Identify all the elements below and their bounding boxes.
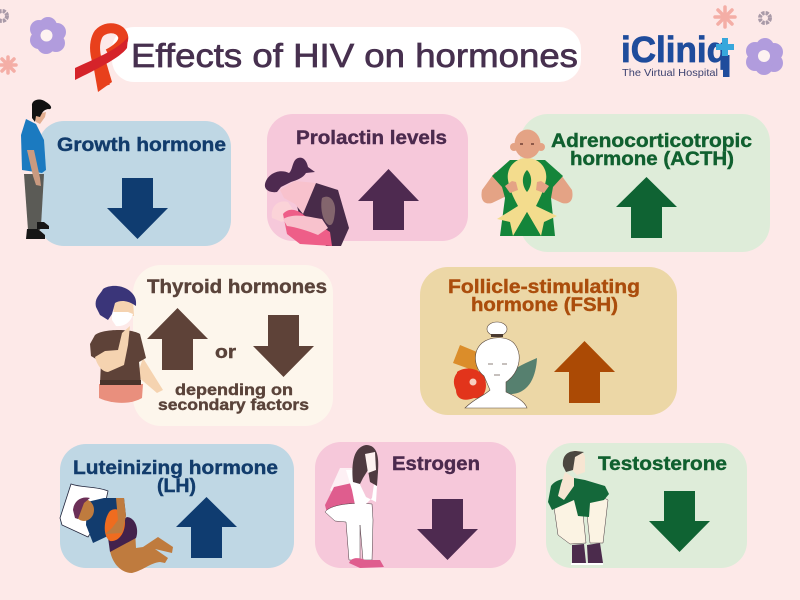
panel: ACTH: hormone (ACTH) <box>570 149 734 170</box>
arrow: down <box>253 315 314 377</box>
panel: thyroid hormones <box>90 265 333 426</box>
icon: man with yellow ribbon <box>481 130 573 236</box>
decorative flowers, top right <box>715 7 783 75</box>
arrow: up <box>147 308 208 370</box>
title banner: Effects of HIV on hormones <box>131 37 578 74</box>
panel: prolactin levels <box>265 114 468 246</box>
decorative flowers, top left <box>0 11 66 73</box>
title banner <box>112 27 581 82</box>
icon: sad woman sitting <box>325 445 384 568</box>
text: secondary factors: depending on <box>175 382 293 399</box>
panel: luteinizing hormone <box>60 444 294 573</box>
heading: estrogen: Estrogen <box>392 454 480 475</box>
icon: person with face mask <box>90 286 163 403</box>
arrow: down <box>649 491 710 552</box>
arrow: up <box>616 177 677 238</box>
panel: FSH: hormone (FSH) <box>471 295 618 316</box>
logo: iCliniq: The Virtual Hospital <box>622 67 718 79</box>
heading: growth hormone: Growth hormone <box>57 135 226 156</box>
icon: woman with flowers <box>453 322 537 408</box>
panel: growth hormone <box>21 99 231 246</box>
heading: testosterone: Testosterone <box>598 454 727 475</box>
icon: sad man sitting <box>548 450 609 565</box>
icon: red awareness ribbon <box>75 28 128 92</box>
panel: ACTH <box>481 114 770 252</box>
heading: prolactin levels: Prolactin levels <box>296 128 447 149</box>
panel: thyroid hormones: secondary factors <box>158 397 309 414</box>
arrow: up <box>554 341 615 403</box>
logo: iCliniq: iCliniq <box>621 29 728 70</box>
panel: luteinizing hormone: (LH) <box>157 476 196 497</box>
panel: testosterone <box>546 443 747 568</box>
icon: woman lying down with cramps <box>60 484 173 573</box>
heading: FSH: Follicle-stimulating <box>448 277 640 298</box>
arrow: down <box>417 499 478 560</box>
icon: mother holding baby <box>265 158 349 246</box>
arrow: up <box>358 169 419 230</box>
arrow: down <box>107 178 168 239</box>
label: or: or <box>215 342 236 362</box>
panel: estrogen <box>315 442 516 568</box>
heading: thyroid hormones: Thyroid hormones <box>147 277 327 298</box>
arrow: up <box>176 497 237 558</box>
icon: man looking down <box>21 99 51 239</box>
heading: LH: Luteinizing hormone <box>73 458 278 479</box>
panel: FSH <box>420 267 677 415</box>
heading: ACTH: Adrenocorticotropic <box>551 131 752 152</box>
